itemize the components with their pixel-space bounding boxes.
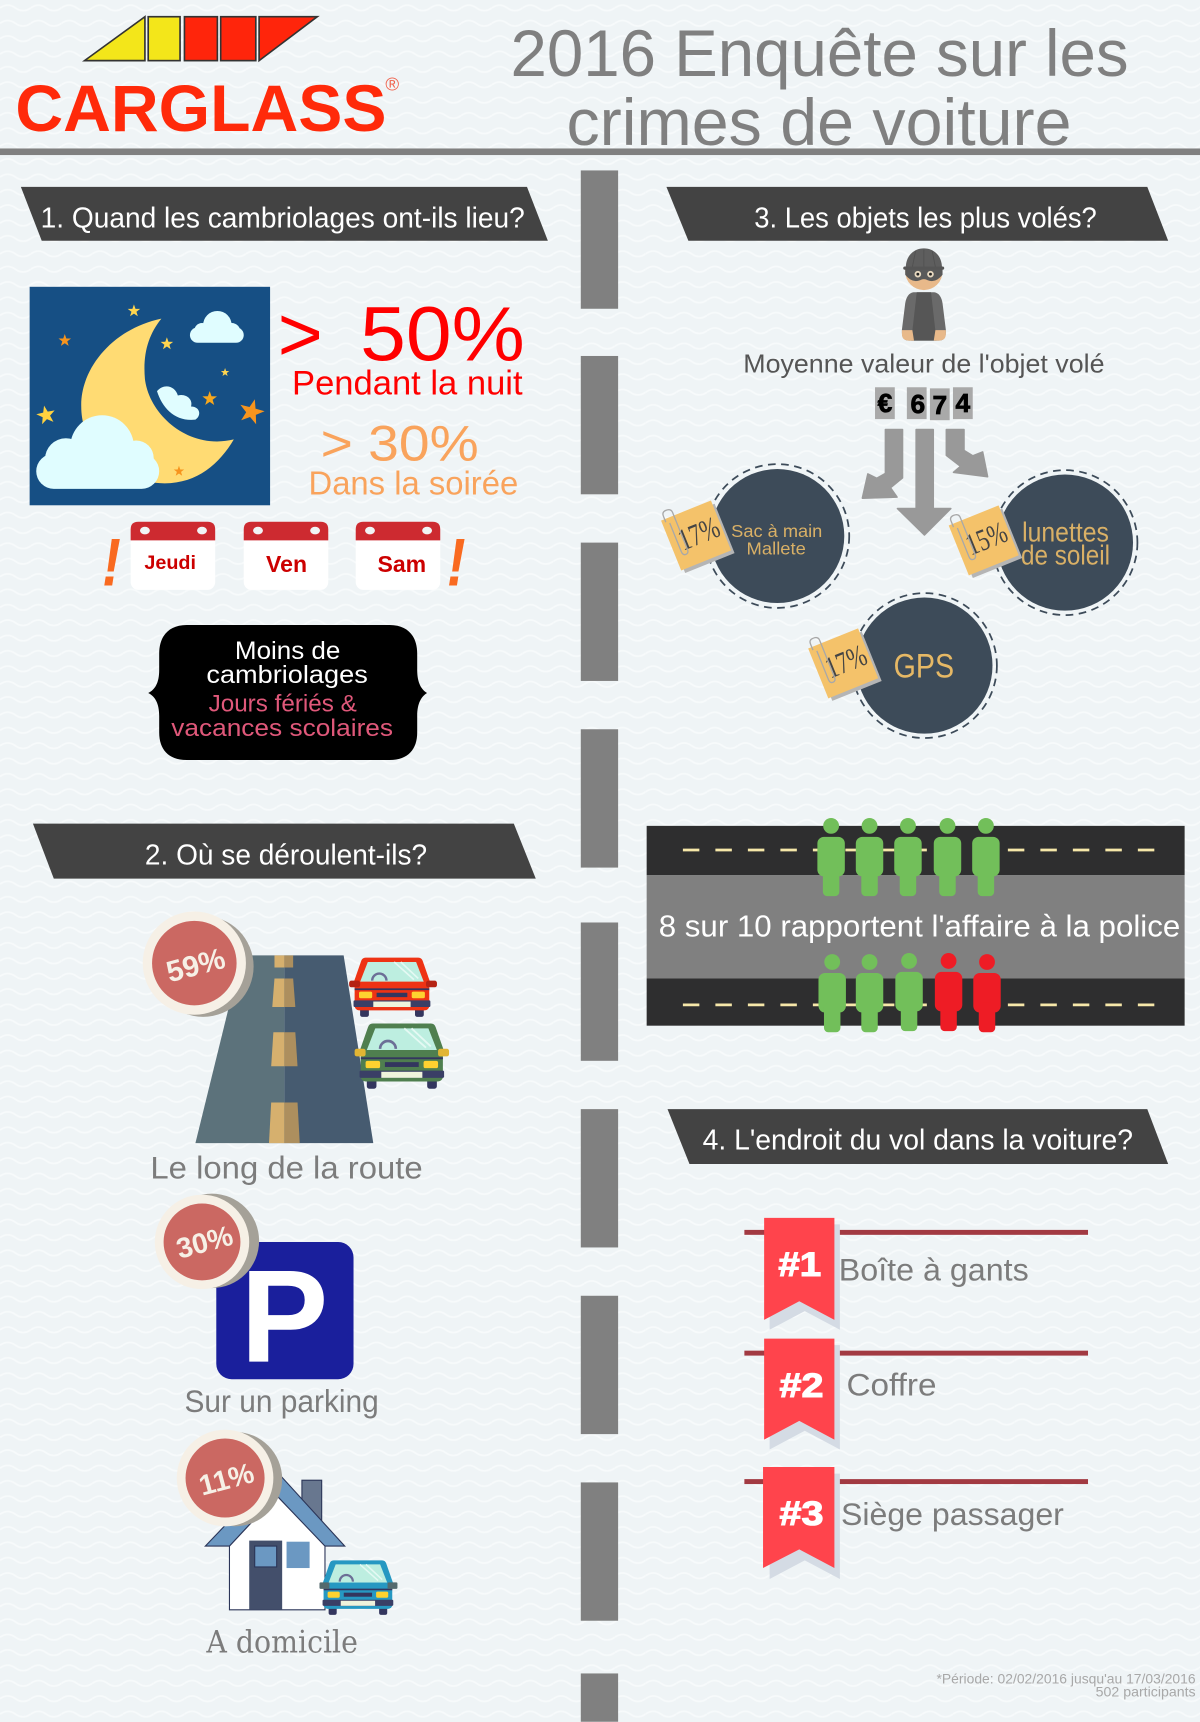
item: sunglasses 15%: lunettes bbox=[1022, 517, 1109, 548]
logo: Carglass: ® bbox=[385, 73, 399, 94]
rank 3: passenger seat: #3 bbox=[780, 1495, 823, 1533]
rank 1: glove box bbox=[744, 1218, 1088, 1330]
badge: 59% bbox=[143, 912, 254, 1017]
icon: parking sign bbox=[216, 1242, 354, 1390]
icon: house with car bbox=[205, 1471, 397, 1615]
centre road dashes bbox=[581, 170, 618, 1722]
item: sunglasses 15%: de soleil bbox=[1021, 540, 1110, 571]
calendar days: Ven bbox=[266, 551, 307, 577]
rank 3: passenger seat bbox=[744, 1467, 1088, 1579]
callout: fewer burglaries: vacances scolaires bbox=[171, 715, 393, 742]
callout: fewer burglaries: Moins de bbox=[235, 637, 340, 665]
title bbox=[511, 16, 1129, 159]
stat: evening 30% bbox=[309, 414, 518, 501]
logo: Carglass bbox=[15, 17, 399, 145]
counter: 674 euros: 6 bbox=[911, 389, 925, 419]
icon: road with cars bbox=[195, 955, 449, 1143]
calendar days bbox=[102, 522, 466, 600]
calendar days: ! bbox=[102, 524, 121, 600]
title: crimes de voiture bbox=[567, 85, 1072, 159]
panel: police report road: 8 sur 10 rapportent l'affaire à la police bbox=[659, 909, 1180, 944]
callout: fewer burglaries: cambriolages bbox=[206, 661, 368, 689]
label: along the road: Le long de la route bbox=[150, 1149, 423, 1185]
item: GPS 17% bbox=[805, 593, 997, 738]
stat: night 50%: > bbox=[278, 291, 323, 377]
heading 4: 4. L'endroit du vol dans la voiture? bbox=[703, 1125, 1133, 1157]
heading 2 bbox=[33, 824, 536, 879]
counter: 674 euros: 4 bbox=[956, 388, 971, 418]
calendar days: ! bbox=[447, 524, 466, 600]
label: at home: A domicile bbox=[205, 1625, 358, 1661]
heading 2: 2. Où se déroulent-ils? bbox=[145, 839, 427, 871]
footnote: 502 participants bbox=[1096, 1684, 1196, 1699]
calendar days: Jeudi bbox=[144, 552, 196, 574]
stat: evening 30%: > 30% bbox=[321, 414, 479, 471]
callout: fewer burglaries bbox=[148, 625, 427, 760]
header divider bbox=[0, 148, 1200, 155]
item: handbag 17% bbox=[658, 464, 849, 608]
item: sunglasses 15% bbox=[946, 470, 1137, 615]
icon: thief bbox=[902, 248, 946, 341]
item: handbag 17%: Mallete bbox=[747, 539, 806, 559]
item: sunglasses 15%: 15% bbox=[961, 515, 1012, 562]
stat: night 50% bbox=[278, 291, 525, 402]
footnote bbox=[937, 1671, 1196, 1699]
panel: police report road bbox=[647, 818, 1185, 1032]
heading 1 bbox=[21, 187, 548, 241]
heading 3 bbox=[666, 187, 1168, 241]
rank 1: glove box: #1 bbox=[778, 1246, 821, 1284]
calendar days: Sam bbox=[377, 551, 426, 577]
label: parking: Sur un parking bbox=[184, 1383, 379, 1419]
rank 2: trunk: #2 bbox=[780, 1367, 823, 1405]
badge: 30% bbox=[155, 1194, 259, 1289]
item: handbag 17%: Sac à main bbox=[731, 521, 822, 541]
rank 2: trunk: Coffre bbox=[846, 1367, 937, 1403]
footnote: *Période: 02/02/2016 jusqu'au 17/03/2016 bbox=[937, 1671, 1196, 1686]
panel: night illustration bbox=[30, 287, 270, 505]
badge: 59%: 59% bbox=[163, 942, 229, 989]
item: GPS 17%: 17% bbox=[820, 638, 872, 685]
counter: 674 euros: 7 bbox=[932, 390, 947, 420]
logo: Carglass: CARGLASS bbox=[15, 71, 386, 145]
stat: night 50%: 50% bbox=[360, 291, 525, 377]
rank 3: passenger seat: Siège passager bbox=[841, 1496, 1064, 1532]
icon: parking sign: P bbox=[240, 1243, 328, 1390]
stat: evening 30%: Dans la soirée bbox=[309, 464, 518, 501]
stat: night 50%: Pendant la nuit bbox=[292, 364, 523, 402]
heading 3: 3. Les objets les plus volés? bbox=[754, 203, 1097, 235]
badge: 11% bbox=[177, 1430, 282, 1526]
heading 1: 1. Quand les cambriolages ont-ils lieu? bbox=[41, 203, 525, 235]
counter: 674 euros: € bbox=[878, 388, 893, 418]
arrows: to stolen items bbox=[862, 430, 988, 535]
item: GPS 17%: GPS bbox=[894, 648, 954, 686]
badge: 30%: 30% bbox=[173, 1220, 236, 1266]
counter: 674 euros bbox=[875, 387, 973, 420]
item: handbag 17%: 17% bbox=[673, 510, 725, 557]
title: 2016 Enquête sur les bbox=[511, 16, 1129, 90]
text: average value: Moyenne valeur de l'objet volé bbox=[743, 348, 1104, 378]
rank 2: trunk bbox=[744, 1339, 1088, 1449]
badge: 11%: 11% bbox=[196, 1457, 258, 1503]
callout: fewer burglaries: Jours fériés & bbox=[209, 691, 357, 718]
heading 4 bbox=[668, 1109, 1168, 1164]
rank 1: glove box: Boîte à gants bbox=[839, 1251, 1029, 1287]
